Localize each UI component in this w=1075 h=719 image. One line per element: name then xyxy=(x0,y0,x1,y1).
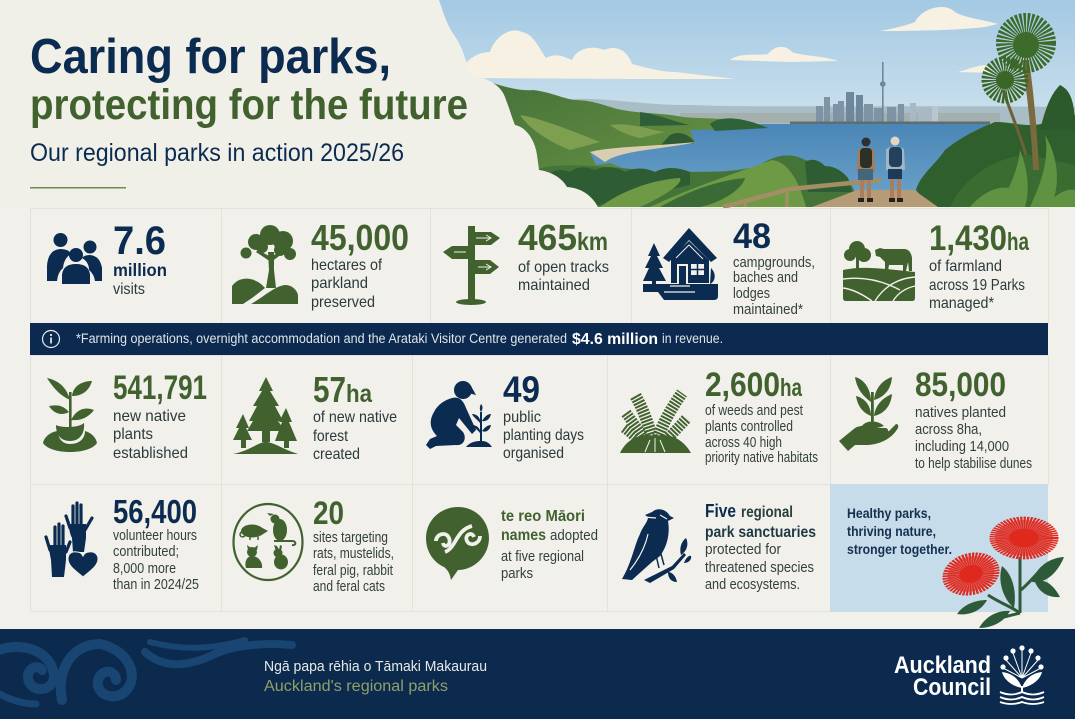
panel: closing message xyxy=(830,484,1048,612)
footer line: te reo: Ngā papa rēhia o Tāmaki Makaurau xyxy=(264,658,487,675)
description: farmland: of farmland xyxy=(929,258,1002,275)
logo: Auckland Council xyxy=(894,645,1044,704)
panel: sanctuaries xyxy=(608,484,830,612)
walking path xyxy=(812,190,938,207)
panel: volunteers xyxy=(30,484,222,612)
logo: Auckland Council: Auckland xyxy=(894,652,991,679)
description: campgrounds: maintained* xyxy=(733,302,803,318)
unit: ha: ha xyxy=(1007,228,1030,256)
description: new native plants: plants xyxy=(113,426,153,443)
stat: 1,430: 1,430 xyxy=(929,219,1007,258)
description: sites targeting xyxy=(313,530,394,595)
hikers xyxy=(857,136,905,202)
description: new native forest: forest xyxy=(313,428,348,445)
description: open tracks xyxy=(518,259,609,294)
description: farmland: across 19 Parks xyxy=(929,277,1025,294)
description: sites targeting: feral pig, rabbit xyxy=(313,563,393,579)
unit: ha: ha xyxy=(346,380,373,408)
panel: dune planting xyxy=(830,356,1048,484)
description: planting days: planting days xyxy=(503,427,584,444)
description: hectares of parkland preserved: preserved xyxy=(311,294,375,311)
logo: Auckland Council: Council xyxy=(913,674,991,701)
description: farmland: managed* xyxy=(929,295,994,312)
stat: 2,600: 2,600 xyxy=(705,366,780,404)
description: natives planted: including 14,000 xyxy=(915,439,1009,455)
icon: person planting xyxy=(426,381,492,449)
city skyline xyxy=(680,62,1000,124)
icon: seedling xyxy=(43,378,97,452)
description: campgrounds: campgrounds, xyxy=(733,255,815,271)
stat: 57: 57 xyxy=(313,369,346,410)
description: new native plants xyxy=(113,408,188,462)
leaves and stems xyxy=(957,557,1064,628)
icon: speech bubble with koru xyxy=(426,507,489,580)
revenue banner xyxy=(30,323,1048,355)
description: sites targeting: and feral cats xyxy=(313,579,385,595)
railing xyxy=(723,180,881,207)
koru pattern xyxy=(0,640,292,704)
description: new native forest: created xyxy=(313,446,360,463)
label: million: million xyxy=(113,260,167,280)
closing message text: Healthy parks, xyxy=(847,505,931,521)
stat: 49: 49 xyxy=(503,369,540,410)
description: weeds and pest plants: across 40 high xyxy=(705,435,782,451)
description: open tracks: of open tracks xyxy=(518,259,609,276)
flax foreground xyxy=(970,135,1075,207)
panel: planting days xyxy=(412,356,608,484)
description: sites targeting: rats, mustelids, xyxy=(313,546,394,562)
closing message text: thriving nature, xyxy=(847,523,936,539)
title block xyxy=(30,30,468,167)
panel: accommodation xyxy=(632,208,830,324)
description: open tracks: maintained xyxy=(518,277,590,294)
closing message text xyxy=(847,505,952,557)
cream title backdrop xyxy=(0,0,598,207)
icon: tree on hills xyxy=(232,225,298,304)
description: natives planted: across 8ha, xyxy=(915,422,982,438)
panel: visits xyxy=(30,208,222,324)
left headland xyxy=(470,75,768,207)
footer line: English: Auckland's regional parks xyxy=(264,678,448,695)
stat: 45,000: 45,000 xyxy=(311,217,409,258)
description: new native forest xyxy=(313,409,397,463)
cabbage trees xyxy=(992,26,1043,170)
subtitle: Our regional parks in action 2025/26 xyxy=(30,139,404,167)
stat: 48: 48 xyxy=(733,217,771,256)
title line 1: Caring for parks, xyxy=(30,30,391,84)
description: hectares of parkland preserved: parkland xyxy=(311,275,368,292)
icon: signpost xyxy=(443,226,500,305)
red blossoms xyxy=(943,520,1053,597)
foreground hills xyxy=(537,155,862,207)
icon: hand with seedling xyxy=(839,377,898,451)
description: natives planted: natives planted xyxy=(915,405,1006,421)
panel: farmland xyxy=(830,208,1048,324)
icon: pohutukawa flowers xyxy=(943,520,1064,628)
icon: people xyxy=(47,233,102,284)
description: adopted: adopted xyxy=(550,528,598,544)
description: weeds and pest plants xyxy=(705,403,818,466)
stat: 85,000: 85,000 xyxy=(915,366,1006,404)
clouds xyxy=(460,7,998,79)
panel: parkland xyxy=(222,208,430,324)
stat: 465: 465 xyxy=(518,217,577,258)
heading: five regional: Five xyxy=(705,501,736,521)
hero landscape illustration xyxy=(430,0,1075,207)
description: campgrounds xyxy=(733,255,815,318)
panel: weeds xyxy=(608,356,830,484)
panel: pest control xyxy=(222,484,412,612)
right bush xyxy=(916,115,1075,207)
description: hectares of parkland preserved xyxy=(311,257,382,311)
description: volunteer hours: than in 2024/25 xyxy=(113,577,199,593)
title line 2: protecting for the future xyxy=(30,81,468,129)
description: volunteer hours: contributed; xyxy=(113,544,179,560)
stat: 56,400: 56,400 xyxy=(113,493,197,530)
description: planting days: organised xyxy=(503,445,564,462)
icon: hands and heart xyxy=(46,503,98,577)
description: protected for: threatened species xyxy=(705,560,814,576)
panel: native forest xyxy=(222,356,412,484)
banner text: *Farming operations, overnight accommodation and the Arataki Visitor Centre generated xyxy=(76,331,567,346)
far shore and hills xyxy=(560,99,1075,130)
stat: 20: 20 xyxy=(313,495,344,531)
unit: ha: ha xyxy=(780,374,803,402)
description: weeds and pest plants: plants controlled xyxy=(705,419,793,435)
logo emblem xyxy=(1000,645,1044,704)
unit: km: km xyxy=(577,228,608,256)
icon: fern xyxy=(620,393,691,453)
footer xyxy=(0,629,1075,719)
description: sites targeting: sites targeting xyxy=(313,530,388,546)
description: planting days: public xyxy=(503,409,541,426)
description: adopted xyxy=(501,528,598,582)
description: farmland xyxy=(929,258,1025,312)
banner end text: in revenue. xyxy=(662,331,723,346)
heading: five regional: regional xyxy=(741,504,793,521)
icon: forest xyxy=(233,377,298,454)
heading: names: names xyxy=(501,527,546,544)
description: natives planted: to help stabilise dunes xyxy=(915,456,1032,472)
description: new native plants: established xyxy=(113,445,188,462)
description: adopted: parks xyxy=(501,566,533,582)
panel: tracks xyxy=(430,208,632,324)
description: volunteer hours: volunteer hours xyxy=(113,528,197,544)
description: campgrounds: baches and xyxy=(733,270,798,286)
stat: 541,791: 541,791 xyxy=(113,369,207,407)
description: volunteer hours xyxy=(113,528,199,593)
harbour water xyxy=(590,124,1010,196)
description: adopted: at five regional xyxy=(501,549,584,565)
description: protected for: and ecosystems. xyxy=(705,577,800,593)
description: new native forest: of new native xyxy=(313,409,397,426)
heading: five regional: park sanctuaries xyxy=(705,524,816,541)
heading: five regional xyxy=(705,501,816,541)
banner figure: $4.6 million xyxy=(572,331,658,348)
icon: info xyxy=(42,330,60,348)
description: new native plants: new native xyxy=(113,408,186,425)
description: planting days xyxy=(503,409,584,462)
icon: animals in a circle xyxy=(234,504,302,580)
icon: bird on branch xyxy=(622,509,691,583)
stat: 7.6: 7.6 xyxy=(113,219,166,263)
panel: te reo names xyxy=(412,484,608,612)
icon: house and pine xyxy=(643,228,718,300)
label: visits: visits xyxy=(113,281,145,298)
description: protected for xyxy=(705,542,814,593)
description: volunteer hours: 8,000 more xyxy=(113,561,176,577)
description: hectares of parkland preserved: hectares of xyxy=(311,257,382,274)
description: weeds and pest plants: priority native habitats xyxy=(705,450,818,466)
description: campgrounds: lodges xyxy=(733,286,770,302)
icon: farm and cow xyxy=(843,241,915,301)
panel: native plants xyxy=(30,356,222,484)
description: weeds and pest plants: of weeds and pest xyxy=(705,403,803,419)
description: natives planted xyxy=(915,405,1032,472)
closing message text: stronger together. xyxy=(847,541,952,557)
description: protected for: protected for xyxy=(705,542,781,558)
heading: te reo Maori: te reo Māori xyxy=(501,508,585,525)
